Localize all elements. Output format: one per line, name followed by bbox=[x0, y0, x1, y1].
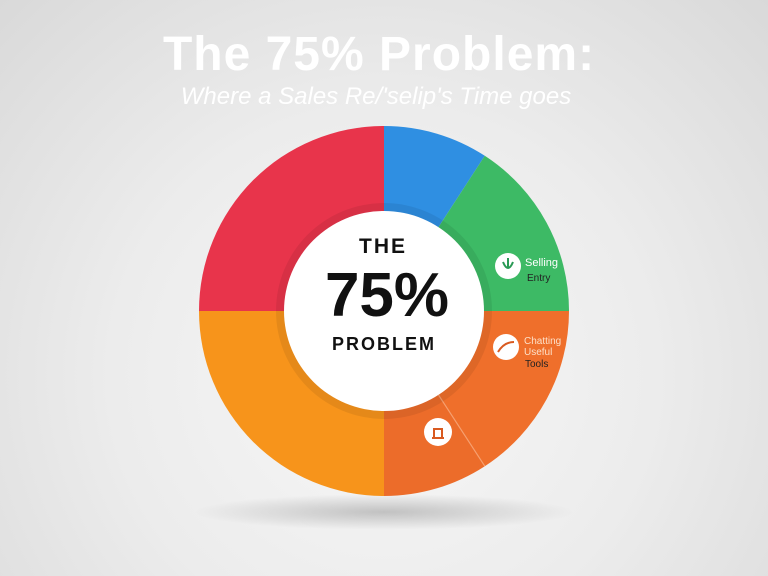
label: selling entry: Entry bbox=[527, 273, 550, 284]
center circle bbox=[284, 211, 484, 411]
donut chart bbox=[199, 126, 569, 496]
segment: orange bbox=[199, 311, 384, 496]
donut shadow bbox=[194, 494, 574, 530]
icon: bottom bbox=[424, 418, 452, 446]
label: chatting useful tools: Chatting bbox=[524, 336, 561, 347]
subtitle: Where a Sales Re/'selip's Time goes bbox=[181, 83, 571, 110]
center text: THE bbox=[359, 235, 407, 258]
center text bbox=[325, 235, 449, 354]
segment: dark orange 2 bbox=[384, 311, 485, 496]
title: The 75% Problem: bbox=[163, 28, 595, 81]
center text: PROBLEM bbox=[332, 334, 436, 354]
label: selling entry: Selling bbox=[525, 257, 558, 269]
label: chatting useful tools: Useful bbox=[524, 347, 552, 358]
label: selling entry bbox=[495, 253, 558, 284]
center text: 75% bbox=[325, 261, 449, 330]
segment: dark orange bbox=[384, 311, 569, 466]
label: chatting useful tools bbox=[493, 334, 561, 370]
segment: blue bbox=[384, 126, 485, 311]
segment: green bbox=[384, 156, 569, 311]
label: chatting useful tools: Tools bbox=[525, 359, 548, 370]
segment: red bbox=[199, 126, 384, 311]
